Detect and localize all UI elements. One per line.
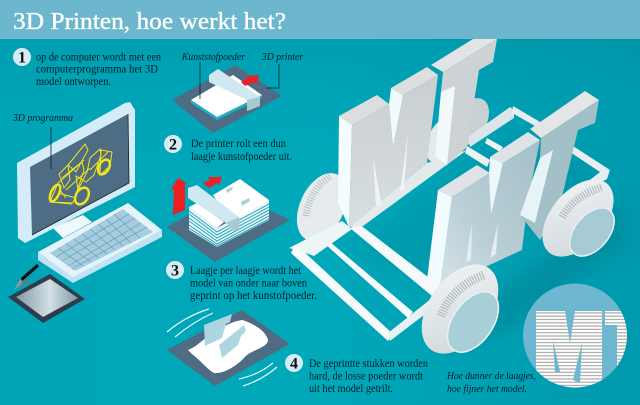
front right wheel (528, 166, 628, 270)
step 4 text: hard, de losse poeder wordt (309, 370, 424, 382)
label: 3D printer: 3D printer (261, 51, 304, 63)
step 3 text: 3 (171, 262, 179, 280)
step 1 text (13, 48, 161, 88)
step 4 text: De geprintte stukken worden (309, 357, 428, 370)
step 2 text (164, 135, 292, 163)
step 2 text: 2 (169, 136, 177, 154)
step 3 text: Laagje per laagje wordt het (190, 264, 302, 277)
illustration: computer monitor (17, 102, 135, 243)
illustration: printer step 2 (167, 177, 290, 262)
step 1 text: op de computer wordt met een (36, 50, 161, 64)
step 4 text: 4 (290, 356, 298, 372)
header bar (0, 0, 640, 39)
label: 3D printer (261, 51, 304, 88)
step 1 text: computerprogramma het 3D (36, 62, 158, 76)
label: Kunststofpoeder (181, 51, 246, 99)
step 3 text: model van onder naar boven (190, 276, 307, 290)
step 3 text (166, 261, 317, 302)
step 2 text: laagje kunstofpoeder uit. (191, 150, 292, 163)
yellow wireframe model (48, 144, 112, 207)
label: 3D programma: 3D programma (12, 112, 73, 124)
rear wheels (287, 91, 497, 249)
illustration: drawing tablet and pen (8, 266, 85, 323)
illustration: shaking out the model (167, 309, 290, 386)
illustration: printer step 1 (172, 65, 282, 133)
illustration: 3D printed MT car (287, 39, 630, 368)
chassis frame (289, 106, 610, 341)
caption: hoe fijner het model. (447, 383, 527, 395)
label: 3D programma (12, 112, 73, 169)
caption (446, 370, 536, 395)
step 2 text: De printer rolt een dun (191, 137, 286, 150)
rear MT letters (338, 39, 497, 227)
step 4 text (285, 354, 428, 395)
front left wheel (406, 250, 514, 368)
label: Kunststofpoeder: Kunststofpoeder (181, 51, 246, 63)
step 1 text: 1 (18, 50, 26, 66)
illustration: keyboard (38, 203, 162, 283)
caption: Hoe dunner de laagjes, (446, 370, 536, 382)
step 1 text: model ontworpen. (36, 75, 111, 88)
title: 3D Printen, hoe werkt het? (13, 9, 286, 35)
inset: layered MT circle (523, 284, 627, 388)
step 3 text: geprint op het kunstofpoeder. (190, 289, 317, 302)
front MT letters (427, 91, 599, 288)
step 4 text: uit het model getrilt. (309, 382, 393, 395)
